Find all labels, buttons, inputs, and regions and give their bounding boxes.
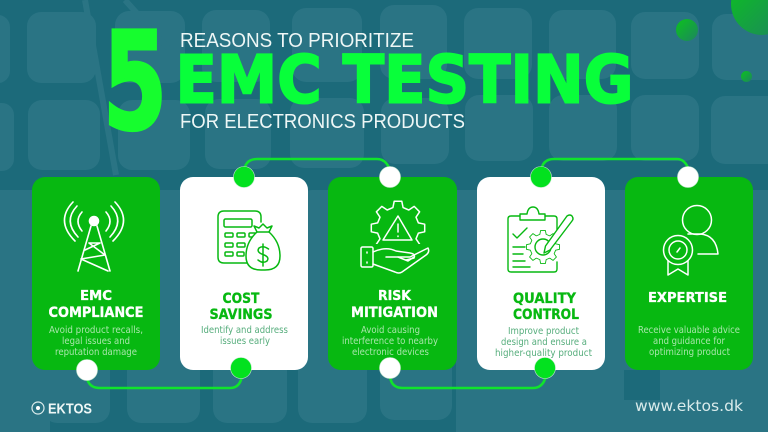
- body text: [49, 325, 143, 358]
- heading: EXPERTISE: [648, 290, 727, 306]
- body text: Avoid product recalls,: [49, 325, 143, 336]
- panel: EMC compliance: COMPLIANCE: [48, 305, 144, 321]
- decorative green orbs: [676, 0, 768, 82]
- panel: EMC compliance: [32, 177, 160, 370]
- body text: [638, 325, 740, 358]
- panel: risk mitigation: [328, 177, 457, 370]
- connector lines: [87, 159, 689, 388]
- body text: Improve product: [508, 326, 579, 337]
- logo: Ektos: EKTOS: [48, 402, 92, 418]
- body text: optimizing product: [649, 347, 730, 358]
- body text: legal issues and: [62, 336, 130, 347]
- connector nodes: [76, 166, 698, 380]
- body text: [342, 325, 438, 358]
- body text: interference to nearby: [342, 336, 438, 347]
- logo: Ektos: [32, 402, 92, 418]
- body text: Avoid causing: [361, 325, 420, 336]
- website address: www.ektos.dk: [635, 397, 743, 415]
- heading: QUALITY: [513, 291, 577, 307]
- body text: [495, 326, 592, 359]
- title line: for electronics products: FOR ELECTRONICS PRODUCTS: [180, 110, 465, 133]
- heading: RISK: [378, 288, 411, 304]
- icon: calculator and money bag: [218, 211, 280, 270]
- body text: electronic devices: [352, 347, 429, 358]
- heading: EMC: [80, 288, 112, 304]
- body text: Identify and address: [201, 325, 288, 336]
- title line: reasons to prioritize: REASONS TO PRIORITIZE: [180, 29, 414, 52]
- numeral 5: 5: [103, 4, 167, 160]
- body text: design and ensure a: [501, 337, 587, 348]
- panel: quality control: CONTROL: [513, 307, 579, 323]
- panel: quality control: [477, 177, 605, 370]
- panel: cost savings: [180, 177, 308, 370]
- body text: reputation damage: [55, 347, 137, 358]
- body text: issues early: [220, 336, 270, 347]
- panel: cost savings: SAVINGS: [210, 307, 272, 323]
- heading: COST: [222, 291, 260, 307]
- body text: Receive valuable advice: [638, 325, 740, 336]
- icon: clipboard, gear and pencil: [508, 207, 573, 272]
- title line: EMC testing: EMC TESTING: [176, 42, 634, 118]
- icon: gear, warning and hand: [360, 201, 432, 278]
- body text: higher-quality product: [495, 348, 592, 359]
- panel: risk mitigation: MITIGATION: [351, 305, 438, 321]
- body text: and guidance for: [653, 336, 725, 347]
- title: [103, 4, 634, 160]
- body text: [201, 325, 288, 347]
- icon: radio tower: [64, 202, 124, 271]
- icon: person with award badge: [664, 206, 718, 275]
- panel: expertise: [625, 177, 753, 370]
